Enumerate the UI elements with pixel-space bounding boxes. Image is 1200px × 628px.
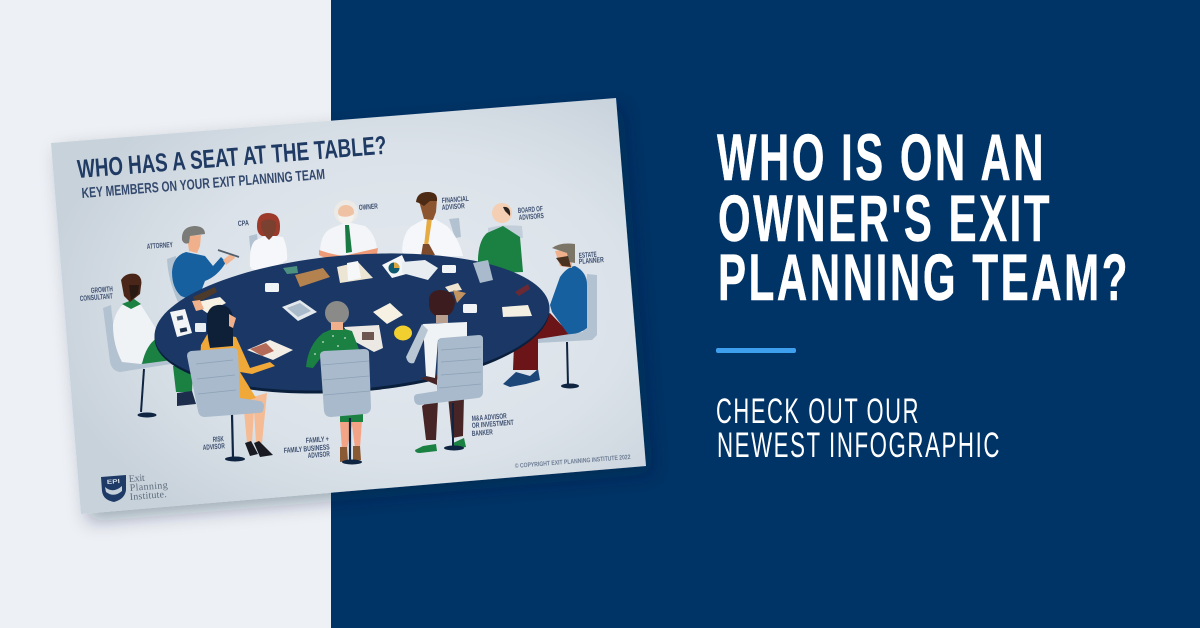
left background panel bbox=[0, 0, 331, 628]
accent bar bbox=[716, 348, 796, 353]
label: estate planner: PLANNER bbox=[578, 255, 604, 266]
piggy bank bbox=[394, 326, 412, 340]
call to action: NEWEST INFOGRAPHIC bbox=[717, 426, 1001, 465]
copyright: © COPYRIGHT EXIT PLANNING INSTITUTE 2022 bbox=[515, 453, 631, 470]
person: attorney bbox=[167, 226, 239, 302]
notepad bbox=[502, 305, 532, 317]
folder bbox=[453, 290, 466, 303]
label: board of advisors bbox=[517, 204, 544, 222]
cup bbox=[442, 265, 456, 273]
tablet bbox=[282, 300, 317, 321]
logo bbox=[101, 473, 168, 503]
laptop bbox=[402, 260, 438, 280]
person: m&a advisor bbox=[406, 290, 483, 453]
label: cpa: CPA bbox=[237, 218, 250, 228]
label: risk advisor: ADVISOR bbox=[202, 441, 225, 452]
coffee cup bbox=[195, 323, 206, 332]
logo wordmark bbox=[128, 473, 168, 503]
call to action: CHECK OUT OUR bbox=[716, 392, 920, 431]
label: financial advisor: FINANCIAL bbox=[441, 194, 469, 205]
person: risk advisor bbox=[187, 305, 275, 462]
person: owner bbox=[319, 200, 378, 261]
label: family and family business advisor bbox=[283, 434, 330, 460]
label: m&a advisor bbox=[471, 411, 514, 438]
table top bbox=[149, 240, 555, 404]
card title: WHO HAS A SEAT AT THE TABLE? bbox=[76, 130, 388, 184]
phone bbox=[283, 266, 298, 274]
label: growth consultant: GROWTH bbox=[90, 284, 113, 295]
label: m&a advisor: M&A ADVISOR bbox=[471, 411, 507, 423]
label: m&a advisor: OR INVESTMENT bbox=[471, 418, 514, 430]
person: financial advisor bbox=[402, 192, 463, 258]
label: owner: OWNER bbox=[358, 202, 378, 212]
folder and paper bbox=[445, 283, 462, 292]
person: growth consultant back bbox=[103, 274, 196, 418]
pie chart paper bbox=[382, 255, 410, 278]
document: one pager bbox=[170, 309, 192, 337]
person: board of advisors bbox=[478, 203, 523, 274]
person: estate planner bbox=[503, 244, 597, 388]
label: financial advisor bbox=[441, 194, 469, 212]
stapler bbox=[515, 284, 530, 296]
label: risk advisor bbox=[202, 434, 225, 452]
label: estate planner: ESTATE bbox=[578, 250, 597, 260]
label: growth consultant: CONSULTANT bbox=[79, 291, 113, 303]
call to action bbox=[716, 392, 1001, 465]
table bbox=[149, 240, 555, 407]
logo wordmark: Institute. bbox=[129, 489, 167, 503]
label: risk advisor: RISK bbox=[212, 434, 224, 444]
person: cpa bbox=[249, 213, 287, 273]
table rim bbox=[149, 241, 555, 407]
card sheet bbox=[51, 98, 646, 514]
logo: EPI bbox=[107, 479, 121, 486]
infographic card bbox=[51, 98, 646, 514]
cup bbox=[265, 283, 279, 292]
label: family and family business advisor: ADVISOR bbox=[307, 449, 330, 460]
label: financial advisor: ADVISOR bbox=[441, 201, 465, 212]
card subtitle: KEY MEMBERS ON YOUR EXIT PLANNING TEAM bbox=[81, 167, 326, 202]
right background panel bbox=[331, 0, 1200, 628]
table items bbox=[170, 255, 532, 360]
logo wordmark: Exit bbox=[128, 473, 145, 485]
label: family and family business advisor: FAMILY BUSINESS bbox=[283, 442, 330, 455]
label: board of advisors: BOARD OF bbox=[517, 204, 543, 215]
person: family advisor bbox=[306, 301, 371, 464]
label: board of advisors: ADVISORS bbox=[518, 211, 544, 222]
book bbox=[295, 268, 330, 287]
board paper bbox=[473, 260, 493, 283]
label: estate planner bbox=[578, 250, 604, 266]
owner documents bbox=[337, 262, 373, 283]
attorney notes and hand bbox=[192, 287, 226, 313]
label: m&a advisor: BANKER bbox=[471, 427, 493, 438]
paper bbox=[373, 303, 403, 324]
risk document bbox=[247, 340, 293, 360]
main heading bbox=[717, 120, 1130, 314]
label: attorney: ATTORNEY bbox=[146, 240, 173, 251]
logo wordmark: Planning bbox=[129, 480, 168, 494]
family photos bbox=[344, 325, 383, 352]
label: growth consultant bbox=[79, 284, 113, 303]
logo shield bbox=[101, 475, 126, 502]
cup bbox=[463, 304, 477, 313]
label: family and family business advisor: FAMILY + bbox=[305, 434, 330, 445]
